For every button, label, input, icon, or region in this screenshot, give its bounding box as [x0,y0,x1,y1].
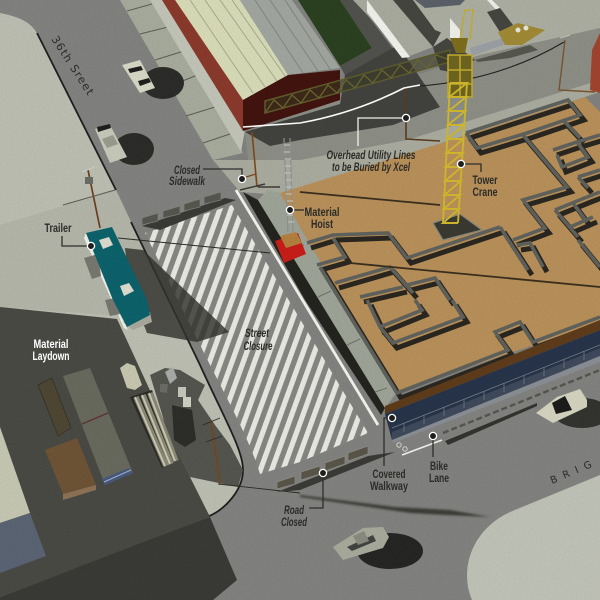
label: material hoist: Hoist [311,217,333,231]
trailer shadow [125,248,229,342]
tower crane [265,10,545,240]
cross street band [245,28,600,178]
label: road closed [281,469,327,529]
sidewalk: lower right corner [467,475,600,600]
label: street closure: Street [245,326,270,340]
lawn [298,0,372,66]
label: street closure: Closure [244,339,273,353]
curb lines [0,33,243,599]
label: covered walkway: Walkway [370,479,408,493]
crane jib shadow across site [300,192,600,287]
building shadow on street [245,45,440,146]
red hoist car [275,232,306,263]
label: bike lane [429,432,449,485]
label: closed sidewalk: Sidewalk [169,174,206,188]
label: trailer: Trailer [44,221,72,235]
street label: 36th Street: 36th Sreet [48,34,97,98]
utility wire highlighted [243,85,420,127]
sidewalk band near trailer [0,190,172,320]
rumble strip [443,370,600,433]
bike lane line [402,440,442,455]
rear buildings and shadows [393,0,513,72]
label: trailer [44,221,95,250]
left building [0,427,46,573]
utility wire dark span [420,42,564,86]
label: material hoist: Material [304,205,340,219]
foundation walls [307,100,600,398]
laydown shadow [0,307,210,597]
site foundation pad [280,97,600,392]
sidewalk: upper left corner [0,13,243,597]
concrete panels beside site [258,190,397,408]
pole near closed sidewalk [240,132,280,190]
street closure hatching [145,205,368,474]
bike symbol [397,443,407,451]
crane cab [450,38,468,53]
shadow of laydown materials [150,368,243,487]
label: overhead utility lines: to be Buried by Xcel [332,160,410,174]
label: road closed: Road [284,503,304,517]
light pole at corner [203,418,300,493]
crane mast [443,83,467,223]
label: tower crane: Crane [472,185,498,199]
red brick building [162,0,340,131]
walkway shadow on road [445,403,537,445]
label: closed sidewalk [169,163,246,188]
label: material hoist [286,205,340,231]
label: covered walkway: Covered [372,467,406,481]
crane counter jib [470,23,545,56]
crane shadow on road [300,495,490,517]
blocks [160,367,196,447]
covered walkway [385,330,600,443]
long container [63,368,133,485]
barricade: road closed [277,446,395,492]
label: material laydown: Laydown [32,349,70,363]
material laydown [38,363,196,500]
hoist mast [284,138,294,232]
pole at trailer [63,167,115,228]
label: material laydown [32,337,70,363]
sidewalk strip along site [213,80,600,195]
street label: Bright: BRIG [549,457,600,487]
crane mast top [448,10,473,97]
label: covered walkway [370,414,408,493]
label: bike lane: Bike [430,459,448,473]
pole on utility line [406,85,440,141]
crane base [433,214,482,240]
back road [340,0,400,75]
trailer [84,227,152,330]
label: tower crane [457,160,498,199]
label: overhead utility lines [326,114,416,174]
shadow on road [0,517,237,600]
label: closed sidewalk: Closed [174,163,200,177]
callout line through trailer [118,238,270,253]
red building at right edge [590,33,600,93]
crane counter shadow [475,45,538,62]
label: street closure [244,326,273,353]
label: tower crane: Tower [472,173,498,187]
far utility pole [559,35,595,92]
concrete sidewalk panels [120,0,245,160]
car: 36th street upper [122,60,184,99]
label: overhead utility lines: Overhead Utility Lines [326,148,416,162]
label: bike lane: Lane [429,471,449,485]
large cylinder [120,363,142,390]
car: lower street [333,527,423,569]
barricade: closed sidewalk [142,192,236,230]
brown crate [45,438,96,500]
AC units [99,237,113,249]
shadow beside barricade [243,192,385,415]
car: right side [536,389,600,428]
label: material laydown: Material [34,337,68,351]
pipe stack [130,390,178,468]
label: road closed: Closed [281,515,307,529]
brown fascia [385,320,600,414]
car: 36th street lower [95,124,154,165]
white building [353,0,433,58]
pallets [38,378,71,436]
white barricade [236,190,378,425]
top right ground [400,0,600,70]
crane jib [265,50,450,113]
